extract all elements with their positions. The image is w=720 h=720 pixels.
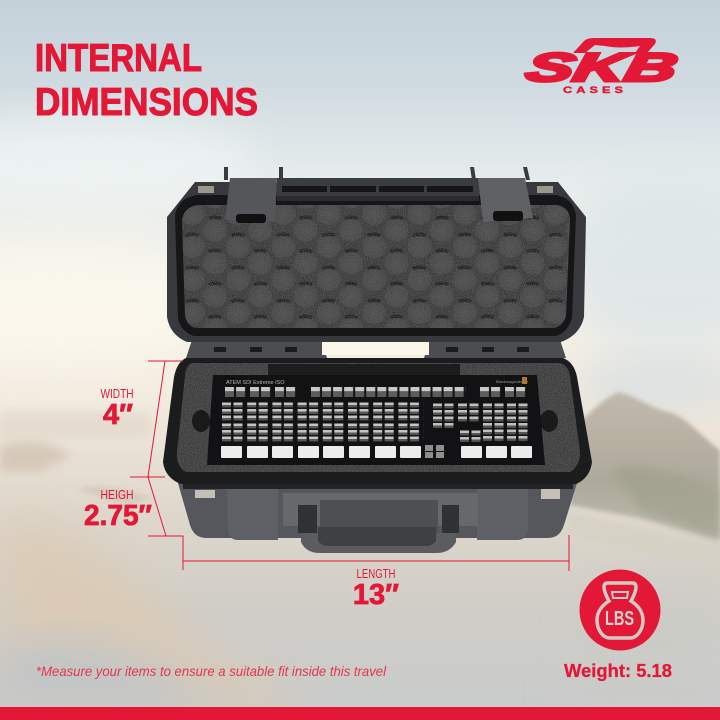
switcher panel — [207, 375, 545, 465]
lid foam — [182, 205, 570, 328]
left latch — [225, 178, 277, 223]
case clasps — [195, 489, 560, 499]
top row keys — [225, 387, 526, 398]
logo: SKB Cases: SKB — [522, 44, 682, 90]
handle — [301, 533, 456, 553]
height dimension: 2.75″ — [84, 500, 152, 532]
panel label: ATEM SDI Extreme ISO — [226, 380, 285, 386]
hinge strip — [186, 340, 566, 358]
case base rim — [163, 358, 592, 484]
weight label: Weight: 5.18 — [564, 660, 672, 681]
key matrix — [222, 402, 424, 422]
length dimension: LENGTH — [356, 567, 396, 581]
height dimension: HEIGH — [100, 488, 134, 502]
length dimension: 13″ — [353, 579, 399, 611]
case lower body — [178, 483, 577, 553]
dimension lines — [130, 361, 569, 571]
base foam — [177, 363, 580, 472]
logo: SKB Cases: CASES — [563, 85, 627, 96]
right latch — [478, 178, 533, 222]
width dimension: 4″ — [103, 399, 133, 431]
hinge posts — [224, 167, 530, 180]
footnote: *Measure your items to ensure a suitable fit inside this travel — [36, 663, 387, 679]
lid hardware — [198, 186, 553, 193]
icon: weight badge: LBS — [605, 608, 634, 630]
title: INTERNAL — [35, 37, 202, 80]
brand label: Blackmagicdesign — [496, 379, 528, 384]
top bar — [277, 178, 479, 198]
title: DIMENSIONS — [35, 81, 258, 124]
transition keys — [433, 403, 456, 429]
icon: weight badge — [580, 570, 660, 650]
width dimension: WIDTH — [100, 387, 134, 401]
product: open travel case — [163, 167, 592, 553]
footer bar — [0, 707, 720, 720]
case lid — [167, 167, 586, 342]
large source keys — [221, 446, 532, 458]
title — [35, 37, 258, 124]
width dimension — [100, 387, 134, 431]
hinge gap — [322, 342, 429, 355]
logo: SKB Cases — [522, 38, 682, 96]
